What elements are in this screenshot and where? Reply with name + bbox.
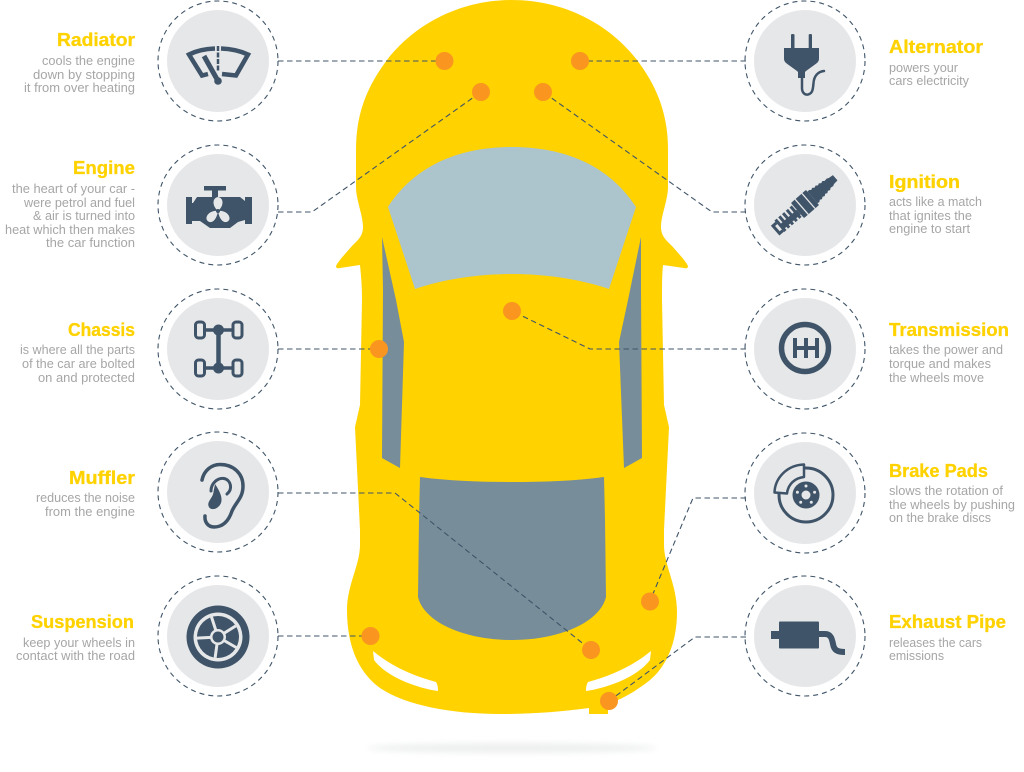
description	[889, 60, 969, 88]
description: cars electricity	[889, 73, 969, 88]
panel: Muffler	[36, 432, 278, 552]
description: were petrol and fuel	[23, 195, 135, 210]
description: acts like a match	[889, 194, 982, 209]
description: powers your	[889, 60, 959, 75]
icon: wheel	[186, 606, 250, 668]
heading: Transmission	[889, 320, 1009, 340]
description: slows the rotation of	[889, 483, 1003, 498]
description	[889, 635, 982, 663]
panel: Radiator	[24, 1, 278, 121]
description: torque and makes	[889, 356, 991, 371]
icon: engine	[186, 186, 252, 228]
description: is where all the parts	[20, 342, 135, 357]
icon: plug	[784, 34, 824, 95]
windshield	[388, 147, 636, 289]
description	[16, 635, 135, 663]
panel: Exhaust Pipe	[745, 576, 1006, 696]
description	[889, 483, 1015, 525]
heading: Exhaust Pipe	[889, 612, 1006, 632]
left light	[373, 651, 438, 691]
heading: Alternator	[889, 37, 983, 57]
description: the car function	[46, 235, 135, 250]
heading: Chassis	[68, 320, 135, 340]
panel: Ignition	[745, 145, 982, 265]
heading: Muffler	[69, 468, 135, 488]
description: cools the engine	[42, 53, 135, 68]
left side window	[382, 237, 404, 468]
heading: Radiator	[57, 30, 135, 50]
right light	[586, 651, 651, 691]
panel: Chassis	[20, 289, 278, 409]
description	[36, 490, 135, 519]
description: from the engine	[45, 504, 135, 519]
panel: Brake Pads	[745, 433, 1015, 553]
icon: wiper	[189, 46, 248, 85]
description	[24, 53, 135, 95]
description: releases the cars	[889, 635, 982, 650]
description	[5, 181, 135, 250]
ground shadow	[367, 743, 657, 753]
icon: chassis	[196, 322, 242, 376]
description: & air is turned into	[33, 208, 135, 223]
description: on and protected	[38, 370, 135, 385]
description: takes the power and	[889, 342, 1003, 357]
panel: Suspension	[16, 576, 278, 696]
car body	[336, 0, 688, 714]
rear window	[418, 477, 606, 640]
description: on the brake discs	[889, 510, 991, 525]
description: the wheels by pushing	[889, 497, 1015, 512]
description: down by stopping	[33, 67, 135, 82]
description	[889, 194, 982, 236]
panel: Engine	[5, 145, 278, 265]
heading: Engine	[73, 158, 135, 178]
description: that ignites the	[889, 208, 972, 223]
heading: Brake Pads	[889, 461, 988, 481]
description: emissions	[889, 648, 944, 663]
description: of the car are bolted	[22, 356, 135, 371]
description: engine to start	[889, 221, 970, 236]
description: it from over heating	[24, 80, 135, 95]
description: reduces the noise	[36, 490, 135, 505]
connector lines	[278, 61, 746, 701]
description: contact with the road	[16, 648, 135, 663]
heading: Suspension	[31, 612, 134, 632]
description: heat which then makes	[5, 222, 135, 237]
description	[20, 342, 135, 385]
panel: Alternator	[745, 1, 983, 121]
description	[889, 342, 1003, 385]
description: the wheels move	[889, 370, 984, 385]
heading: Ignition	[889, 172, 960, 192]
panel: Transmission	[745, 289, 1009, 409]
icon: gear shift	[782, 324, 828, 372]
right side window	[619, 237, 642, 468]
description: keep your wheels in	[23, 635, 135, 650]
icon: exhaust	[771, 622, 845, 652]
icon: ear	[202, 464, 243, 527]
icon: brake disc	[774, 464, 833, 522]
description: the heart of your car -	[12, 181, 135, 196]
car illustration	[336, 0, 688, 714]
icon: spark plug	[768, 170, 842, 238]
marker dots	[362, 52, 659, 710]
